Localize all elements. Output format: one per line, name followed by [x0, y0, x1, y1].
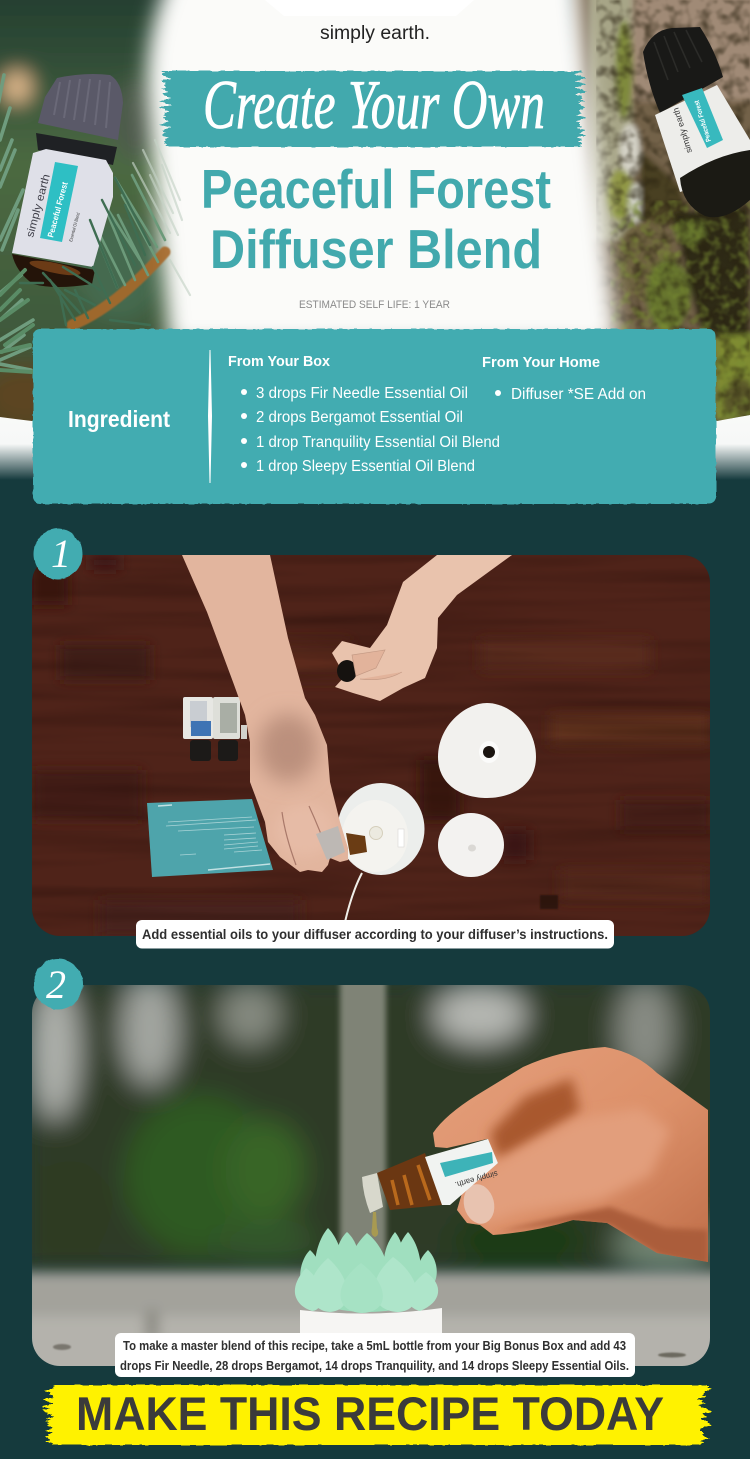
call to action text: MAKE THIS RECIPE TODAY	[76, 1387, 664, 1440]
wood planks	[32, 555, 710, 936]
wood grain	[32, 555, 710, 936]
column heading: from your box: From Your Box	[228, 353, 331, 370]
diffuser lid	[438, 813, 504, 877]
photo: blurred forest backdrop	[0, 0, 178, 421]
bottle base	[12, 254, 95, 287]
step 2 badge: 2	[46, 962, 66, 1007]
pale fading needles	[133, 140, 190, 295]
photo: bark backdrop	[570, 0, 750, 430]
caption: step 2: drops Fir Needle, 28 drops Bergamot, 14 drops Tranquility, and 14 drops Sleepy Essential Oils.	[120, 1359, 629, 1373]
script heading: Create Your Own	[203, 67, 545, 144]
oil bottle label	[425, 1139, 498, 1205]
oil bottle brand text: simply earth.	[454, 1169, 499, 1189]
heading brush banner	[165, 67, 581, 147]
amber bottle in hand	[316, 826, 367, 860]
vertical divider	[208, 350, 212, 483]
right arm with hand	[332, 555, 512, 701]
teal panel background	[33, 329, 716, 504]
blurred centre post	[340, 975, 386, 1270]
diffuser dome	[438, 703, 536, 798]
caption: step 2: To make a master blend of this recipe, take a 5mL bottle from your Big Bonus Box and add 43	[123, 1339, 626, 1353]
bottle cap in hand	[337, 660, 357, 682]
bottle base	[680, 150, 750, 217]
back needles	[90, 175, 165, 287]
call to action banner	[48, 1385, 704, 1445]
left product bottle	[12, 74, 123, 287]
oil bottle glass	[377, 1153, 442, 1210]
bottle small print: Essential Oil Blend	[68, 212, 81, 242]
teal brush stroke	[165, 71, 581, 147]
box ingredient list	[241, 385, 500, 475]
bottle cap	[38, 74, 123, 140]
lower-left needle foliage	[0, 270, 33, 372]
caption: step 1	[136, 920, 614, 948]
caption: step 2	[115, 1333, 635, 1377]
yellow brush stroke	[48, 1385, 704, 1445]
box ingredient list: 1 drop Sleepy Essential Oil Blend	[256, 458, 475, 475]
blurred table	[20, 1272, 740, 1386]
header white fade	[0, 400, 750, 480]
bottle name text: Peaceful Forest	[45, 181, 70, 239]
logo: simply earth.	[320, 23, 430, 44]
box ingredient list: 1 drop Tranquility Essential Oil Blend	[256, 434, 500, 451]
bottles on table	[183, 697, 247, 761]
step 1 photo: wood table with diffuser	[30, 550, 710, 936]
thumb and palm crease	[352, 650, 402, 680]
dropper tip	[362, 1173, 383, 1213]
bottle name text: Peaceful Forest	[693, 99, 713, 142]
top notch	[265, 0, 474, 16]
shelf life note: ESTIMATED SELF LIFE: 1 YEAR	[299, 299, 450, 311]
left-edge needles	[0, 75, 33, 370]
bottle cap	[643, 27, 723, 113]
central white glow	[147, 0, 618, 345]
bottle teal label	[682, 88, 723, 148]
step 2 photo: dropping oil on diffuser	[20, 975, 740, 1386]
bottle teal label	[40, 162, 78, 242]
bottle neck	[36, 133, 117, 165]
title line 2: Diffuser Blend	[210, 218, 542, 280]
header photo: left pine and right bark	[0, 0, 750, 450]
blurred forest background	[20, 975, 740, 1275]
hand holding bottle	[420, 1040, 720, 1270]
bottle body	[12, 149, 113, 267]
thumb nail	[460, 1181, 498, 1227]
column heading: from your home: From Your Home	[482, 354, 600, 371]
step 1 badge: 1	[51, 531, 71, 576]
succulent body	[301, 1258, 433, 1312]
caption: step 1: Add essential oils to your diffuser according to your diffuser’s instructions.	[142, 926, 608, 942]
bottle brand text: simply earth	[24, 173, 53, 239]
oil drop	[371, 1212, 378, 1237]
title line 1: Peaceful Forest	[201, 158, 551, 220]
step 2 badge	[34, 958, 82, 1010]
succulent diffuser	[295, 1228, 438, 1313]
diffuser base	[338, 783, 424, 875]
box ingredient list: 2 drops Bergamot Essential Oil	[256, 409, 463, 426]
diffuser pot	[300, 1308, 442, 1340]
bottle brand text: simply earth	[671, 106, 694, 154]
home ingredient list: Diffuser *SE Add on	[511, 386, 646, 403]
front needles	[20, 178, 150, 325]
pine twig	[72, 252, 165, 325]
recipe card	[147, 799, 273, 877]
front leaves	[295, 1257, 438, 1313]
panel: ingredients	[33, 329, 716, 504]
step 1 badge	[34, 528, 82, 580]
right product bottle	[643, 27, 750, 217]
bottle body	[655, 85, 750, 192]
left arm with hand	[182, 555, 348, 872]
ingredient heading: Ingredient	[68, 406, 170, 432]
box ingredient list: 3 drops Fir Needle Essential Oil	[256, 385, 468, 402]
title	[201, 158, 551, 280]
diffuser cord	[345, 873, 362, 922]
back leaves	[300, 1228, 437, 1298]
